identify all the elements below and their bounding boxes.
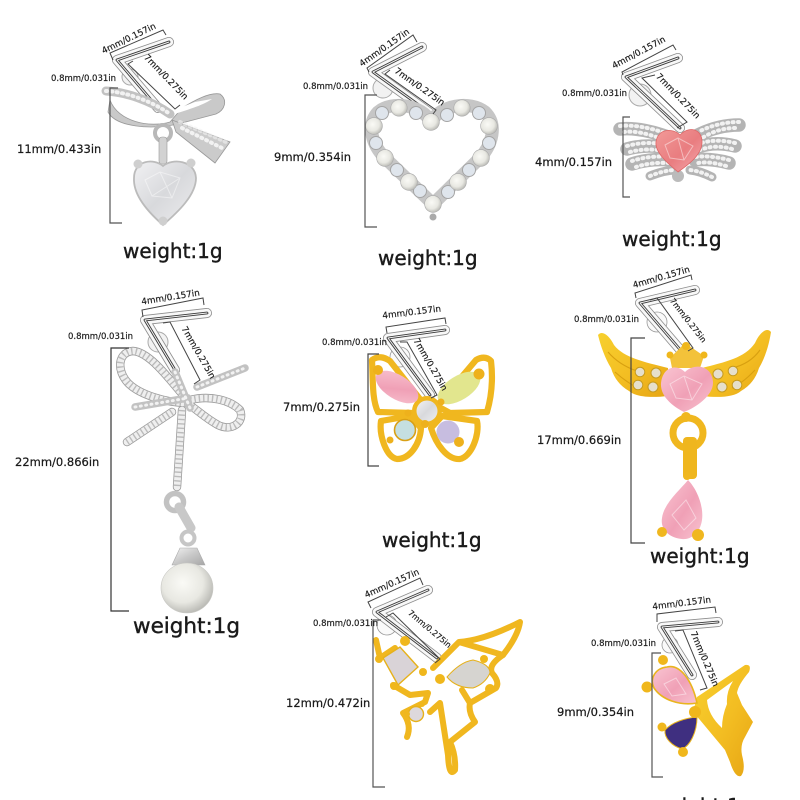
- label: pin length size: 7mm/0.275in: [392, 66, 446, 108]
- dimension bracket: pin length: [128, 61, 180, 109]
- label: weight: weight:1g: [622, 227, 722, 251]
- dimension bracket: pin length: [650, 298, 693, 351]
- dimension bracket: height: [652, 653, 663, 777]
- label: weight: weight:1g: [382, 528, 482, 552]
- dimension bracket: pin top: [635, 275, 692, 298]
- label: gauge: 0.8mm/0.031in: [574, 315, 639, 325]
- L-shaped pin: [662, 622, 718, 675]
- label: pin top size: 4mm/0.157in: [382, 304, 442, 322]
- panel: gold butterfly with gems: [283, 304, 492, 552]
- panel: gold half butterfly with pink and purple gems: [557, 595, 753, 800]
- panel: gold abstract butterfly with crystals: [286, 568, 520, 787]
- L-shaped pin: [626, 58, 680, 128]
- jewelry: molten gold butterfly: [375, 622, 520, 772]
- dimension bracket: pin length: [385, 70, 436, 114]
- L-shaped pin: [377, 590, 437, 658]
- label: gauge: 0.8mm/0.031in: [562, 89, 627, 99]
- L-shaped pin: [145, 313, 207, 370]
- dimension bracket: height: [631, 338, 645, 543]
- dimension bracket: height: [623, 117, 630, 197]
- dimension bracket: height: [110, 88, 122, 223]
- jewelry: winged pink heart: [620, 122, 739, 182]
- label: gauge: 0.8mm/0.031in: [68, 332, 133, 342]
- label: gauge: 0.8mm/0.031in: [51, 74, 116, 84]
- label: height: 7mm/0.275in: [283, 400, 360, 414]
- label: weight: weight:1g: [378, 246, 478, 270]
- label: height: 4mm/0.157in: [535, 155, 612, 169]
- dimension bracket: height: [365, 95, 377, 227]
- label: pin length size: 7mm/0.275in: [653, 72, 701, 121]
- L-shaped pin: [117, 42, 169, 108]
- label: pin length size: 7mm/0.275in: [179, 325, 217, 381]
- dimension bracket: pin top: [386, 318, 446, 333]
- dimension bracket: pin length: [675, 630, 707, 690]
- label: height: 9mm/0.354in: [557, 705, 634, 719]
- jewelry: gold butterfly: [370, 357, 492, 459]
- label: pin top size: 4mm/0.157in: [358, 27, 412, 69]
- dimension bracket: pin top: [622, 45, 676, 75]
- jewelry: gold winged heart with teardrop: [598, 330, 771, 541]
- label: weight: weight:1g: [123, 239, 223, 263]
- label: gauge: 0.8mm/0.031in: [322, 338, 387, 348]
- label: pin length size: 7mm/0.275in: [688, 630, 720, 688]
- jewelry: half butterfly: [642, 655, 753, 776]
- label: pin top size: 4mm/0.157in: [363, 568, 421, 601]
- dimension bracket: pin top: [110, 30, 166, 60]
- label: pin length size: 7mm/0.275in: [141, 53, 189, 102]
- jewelry: pearl heart: [366, 100, 497, 220]
- dimension bracket: height: [368, 354, 379, 466]
- label: height: 17mm/0.669in: [537, 433, 621, 447]
- label: gauge: 0.8mm/0.031in: [303, 82, 368, 92]
- label: weight: weight:1g: [650, 544, 750, 568]
- label: gauge: 0.8mm/0.031in: [313, 619, 378, 629]
- jewelry: rope bow and pearl drop: [120, 351, 245, 613]
- panel: silver rope bow with pearl: [15, 288, 245, 639]
- label: pin length size: 7mm/0.275in: [406, 608, 453, 650]
- label: pin top size: 4mm/0.157in: [141, 288, 201, 308]
- label: pin length size: 7mm/0.275in: [668, 297, 708, 344]
- panel: silver pearl heart: [274, 27, 497, 270]
- dimension bracket: pin top: [368, 578, 423, 608]
- panel: gold wings with pink heart and drop: [537, 265, 771, 568]
- panel: silver bow with heart charm: [17, 22, 230, 263]
- label: height: 22mm/0.866in: [15, 455, 99, 469]
- dimension bracket: pin top: [142, 298, 204, 317]
- label: pin top size: 4mm/0.157in: [652, 595, 712, 613]
- dimension bracket: pin top: [657, 607, 716, 622]
- L-shaped pin: [640, 290, 695, 353]
- L-shaped pin: [373, 47, 430, 113]
- label: height: 9mm/0.354in: [274, 150, 351, 164]
- label: pin top size: 4mm/0.157in: [611, 35, 667, 71]
- dimension bracket: height: [373, 620, 385, 787]
- dimension bracket: pin length: [386, 613, 440, 663]
- label: height: 12mm/0.472in: [286, 696, 370, 710]
- label: height: 11mm/0.433in: [17, 142, 101, 156]
- label: pin top size: 4mm/0.157in: [632, 265, 691, 291]
- dimension bracket: pin length: [400, 342, 437, 398]
- panel: silver wings with pink heart: [535, 35, 739, 251]
- jewelry: bow with dangling heart: [106, 91, 230, 226]
- label: pin top size: 4mm/0.157in: [100, 22, 158, 57]
- dimension bracket: height: [111, 348, 129, 611]
- dimension bracket: pin top: [367, 35, 417, 72]
- L-shaped pin: [388, 330, 445, 395]
- label: pin length size: 7mm/0.275in: [411, 337, 449, 393]
- dimension bracket: pin length: [163, 322, 200, 384]
- label: gauge: 0.8mm/0.031in: [591, 639, 656, 649]
- label: weight: weight:1g: [133, 614, 240, 639]
- dimension bracket: pin length: [642, 75, 687, 128]
